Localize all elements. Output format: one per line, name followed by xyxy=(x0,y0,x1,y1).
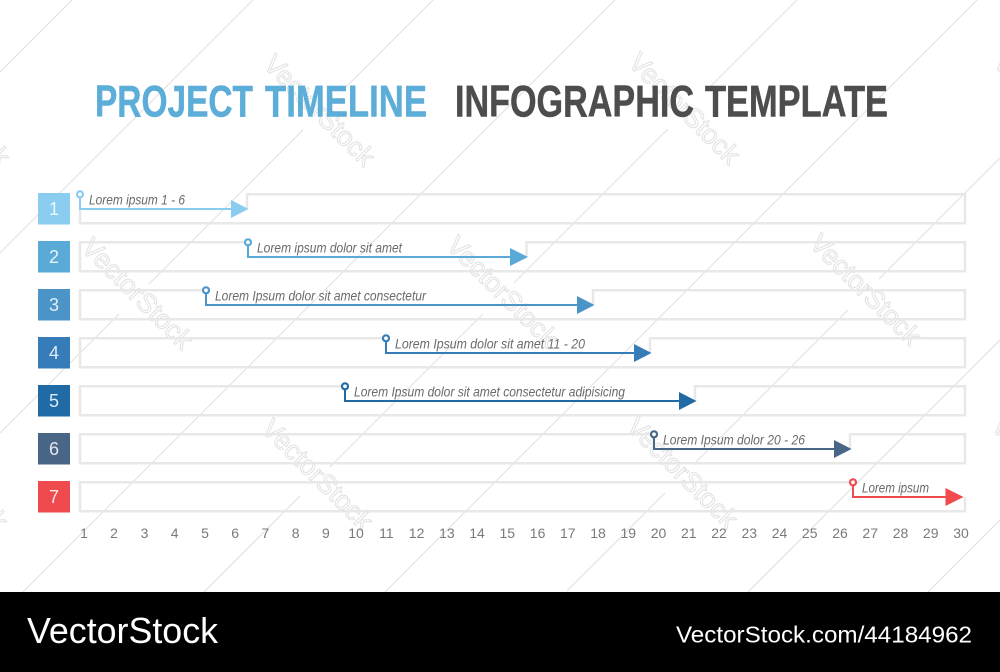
axis: day numbers 1 to 30: 2 xyxy=(110,525,118,541)
row 2 xyxy=(38,239,965,272)
axis: day numbers 1 to 30: 28 xyxy=(893,525,908,541)
title: project timeline xyxy=(95,78,427,127)
axis: day numbers 1 to 30: 18 xyxy=(590,525,606,541)
axis: day numbers 1 to 30: 5 xyxy=(201,525,209,541)
footer url: VectorStock.com/44184962 xyxy=(676,622,972,648)
text: VectorStock xyxy=(804,228,927,351)
row 7: Lorem ipsum xyxy=(862,480,929,496)
axis: day numbers 1 to 30: 19 xyxy=(621,525,636,541)
row 7: 7 xyxy=(49,487,59,507)
row 1 xyxy=(38,191,965,224)
title: project timeline: PROJECT xyxy=(95,78,253,127)
axis: day numbers 1 to 30: 27 xyxy=(862,525,878,541)
axis: day numbers 1 to 30: 12 xyxy=(409,525,425,541)
row 5: 5 xyxy=(49,391,59,411)
axis: day numbers 1 to 30: 17 xyxy=(560,525,576,541)
title xyxy=(95,78,888,127)
row 3: Lorem Ipsum dolor sit amet consectetur xyxy=(215,288,427,304)
row 3 xyxy=(38,287,965,320)
title: infographic template: TEMPLATE xyxy=(705,78,888,127)
row 7 xyxy=(38,479,965,512)
footer bar xyxy=(0,592,1000,672)
row 4: 4 xyxy=(49,343,59,363)
row 5 xyxy=(38,383,965,416)
axis: day numbers 1 to 30: 29 xyxy=(923,525,939,541)
axis: day numbers 1 to 30: 7 xyxy=(262,525,270,541)
text: VectorStock xyxy=(76,232,199,355)
axis: day numbers 1 to 30: 30 xyxy=(953,525,969,541)
row 6: 6 xyxy=(49,439,59,459)
axis: day numbers 1 to 30: 26 xyxy=(832,525,848,541)
text: VectorStock xyxy=(256,413,379,536)
gantt chart xyxy=(38,191,969,541)
footer logo: VectorStock xyxy=(27,610,219,651)
axis: day numbers 1 to 30: 24 xyxy=(772,525,787,541)
row 4: Lorem Ipsum dolor sit amet 11 - 20 xyxy=(395,336,585,352)
axis: day numbers 1 to 30: 3 xyxy=(141,525,149,541)
text: VectorStock xyxy=(441,230,564,353)
row 1: 1 xyxy=(49,199,59,219)
text: VectorStock xyxy=(623,47,746,170)
axis: day numbers 1 to 30: 8 xyxy=(292,525,300,541)
row 2: 2 xyxy=(49,247,59,267)
row 6: Lorem Ipsum dolor 20 - 26 xyxy=(663,432,805,448)
axis: day numbers 1 to 30 xyxy=(80,525,969,541)
axis: day numbers 1 to 30: 9 xyxy=(322,525,330,541)
axis: day numbers 1 to 30: 20 xyxy=(651,525,666,541)
axis: day numbers 1 to 30: 15 xyxy=(500,525,515,541)
row 2: Lorem ipsum dolor sit amet xyxy=(257,240,403,256)
row 1: Lorem ipsum 1 - 6 xyxy=(89,192,185,208)
axis: day numbers 1 to 30: 10 xyxy=(348,525,364,541)
axis: day numbers 1 to 30: 6 xyxy=(231,525,239,541)
axis: day numbers 1 to 30: 11 xyxy=(379,525,394,541)
axis: day numbers 1 to 30: 23 xyxy=(742,525,757,541)
row 6 xyxy=(38,431,965,464)
row 4 xyxy=(38,335,965,368)
axis: day numbers 1 to 30: 13 xyxy=(439,525,455,541)
row 5: Lorem Ipsum dolor sit amet consectetur adipisicing xyxy=(354,384,625,400)
text: VectorStock xyxy=(621,411,744,534)
axis: day numbers 1 to 30: 25 xyxy=(802,525,818,541)
axis: day numbers 1 to 30: 16 xyxy=(530,525,546,541)
title: project timeline: TIMELINE xyxy=(265,78,427,127)
axis: day numbers 1 to 30: 4 xyxy=(171,525,179,541)
row 3: 3 xyxy=(49,295,59,315)
axis: day numbers 1 to 30: 21 xyxy=(681,525,697,541)
text: VectorStock xyxy=(258,49,381,172)
title: infographic template: INFOGRAPHIC xyxy=(455,78,694,127)
axis: day numbers 1 to 30: 14 xyxy=(469,525,485,541)
axis: day numbers 1 to 30: 22 xyxy=(711,525,727,541)
axis: day numbers 1 to 30: 1 xyxy=(80,525,88,541)
